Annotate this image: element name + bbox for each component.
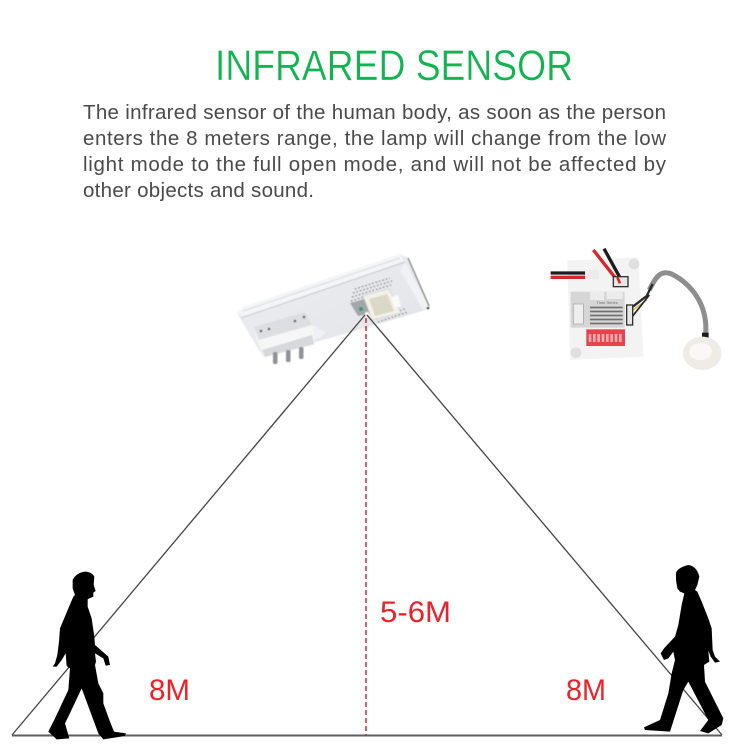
title: INFRARED SENSOR (215, 42, 573, 90)
wires (551, 249, 622, 282)
description text block (83, 101, 667, 202)
DIP switch (586, 329, 625, 346)
silhouette: left person (48, 572, 126, 739)
sensor cable (649, 273, 706, 335)
label: height 5-6M: 5-6M (380, 596, 451, 629)
LED module (363, 289, 401, 320)
silhouette: right person (644, 565, 723, 733)
label: right 8M: 8M (566, 674, 606, 707)
description text block: The infrared sensor of the human body, as soon as the person (83, 101, 666, 124)
sensor window (350, 299, 370, 316)
description text block: other objects and sound. (83, 179, 314, 202)
lamp bolts (273, 347, 304, 364)
description text block: enters the 8 meters range, the lamp will change from the low (83, 127, 666, 150)
detection range triangle (12, 315, 722, 736)
mounting height dashed line (365, 318, 367, 735)
description text block: light mode to the full open mode, and will not be affected by (83, 153, 667, 176)
icon: PIR sensor module: Time Series (597, 300, 618, 305)
lamp bracket (254, 312, 326, 357)
icon: PIR sensor module (551, 249, 722, 370)
PIR dome (683, 337, 722, 370)
icon: solar street lamp (237, 254, 429, 364)
label: left 8M: 8M (149, 674, 190, 707)
label panel (571, 292, 625, 328)
vent dots (351, 278, 408, 322)
